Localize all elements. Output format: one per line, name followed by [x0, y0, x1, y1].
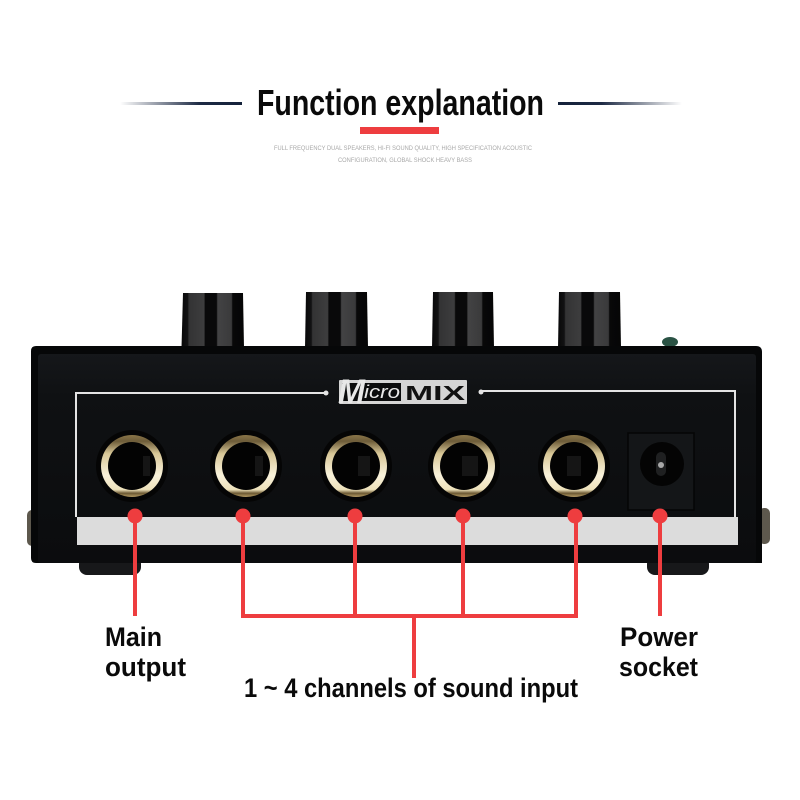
power socket — [628, 433, 694, 510]
jacks — [96, 430, 610, 502]
enclosure — [31, 346, 762, 563]
LED — [662, 337, 678, 347]
label: main output — [105, 622, 186, 682]
mixer device — [27, 292, 770, 575]
jack: channel 4 — [538, 430, 610, 502]
MicroMIX logo: M — [338, 373, 366, 411]
label: power socket: Power — [620, 622, 698, 652]
MicroMIX logo — [338, 373, 467, 411]
rubber feet — [79, 556, 709, 575]
subtitle — [274, 146, 533, 164]
jack: main output — [96, 430, 168, 502]
red connector lines — [135, 516, 660, 678]
title: Function explanation — [257, 82, 544, 123]
label: power socket — [619, 622, 698, 682]
MicroMIX logo: icro — [364, 382, 400, 402]
front face — [38, 354, 756, 563]
subtitle: FULL FREQUENCY DUAL SPEAKERS, HI-FI SOUND QUALITY, HIGH SPECIFICATION ACOUSTIC — [274, 146, 533, 152]
red dots — [128, 508, 668, 524]
knobs — [182, 292, 621, 348]
side connectors — [27, 508, 770, 546]
white front-panel frame — [76, 391, 735, 517]
left header rule — [120, 102, 242, 105]
label: channels: 1 ~ 4 channels of sound input — [244, 673, 578, 703]
MicroMIX logo: MIX — [405, 383, 466, 405]
line: main output — [133, 516, 137, 616]
jack: channel 1 — [210, 430, 282, 502]
line: power socket — [658, 516, 662, 616]
jack: channel 2 — [320, 430, 392, 502]
header — [120, 82, 682, 164]
label: main output: Main — [105, 622, 162, 652]
right header rule — [558, 102, 682, 105]
label: main output: output — [105, 652, 186, 682]
light grey stripe — [77, 517, 738, 545]
jack: channel 3 — [428, 430, 500, 502]
subtitle: CONFIGURATION, GLOBAL SHOCK HEAVY BASS — [338, 158, 472, 164]
red accent bar — [360, 127, 439, 134]
label: power socket: socket — [619, 652, 698, 682]
bracket: channels 1 to 4 — [243, 516, 576, 678]
